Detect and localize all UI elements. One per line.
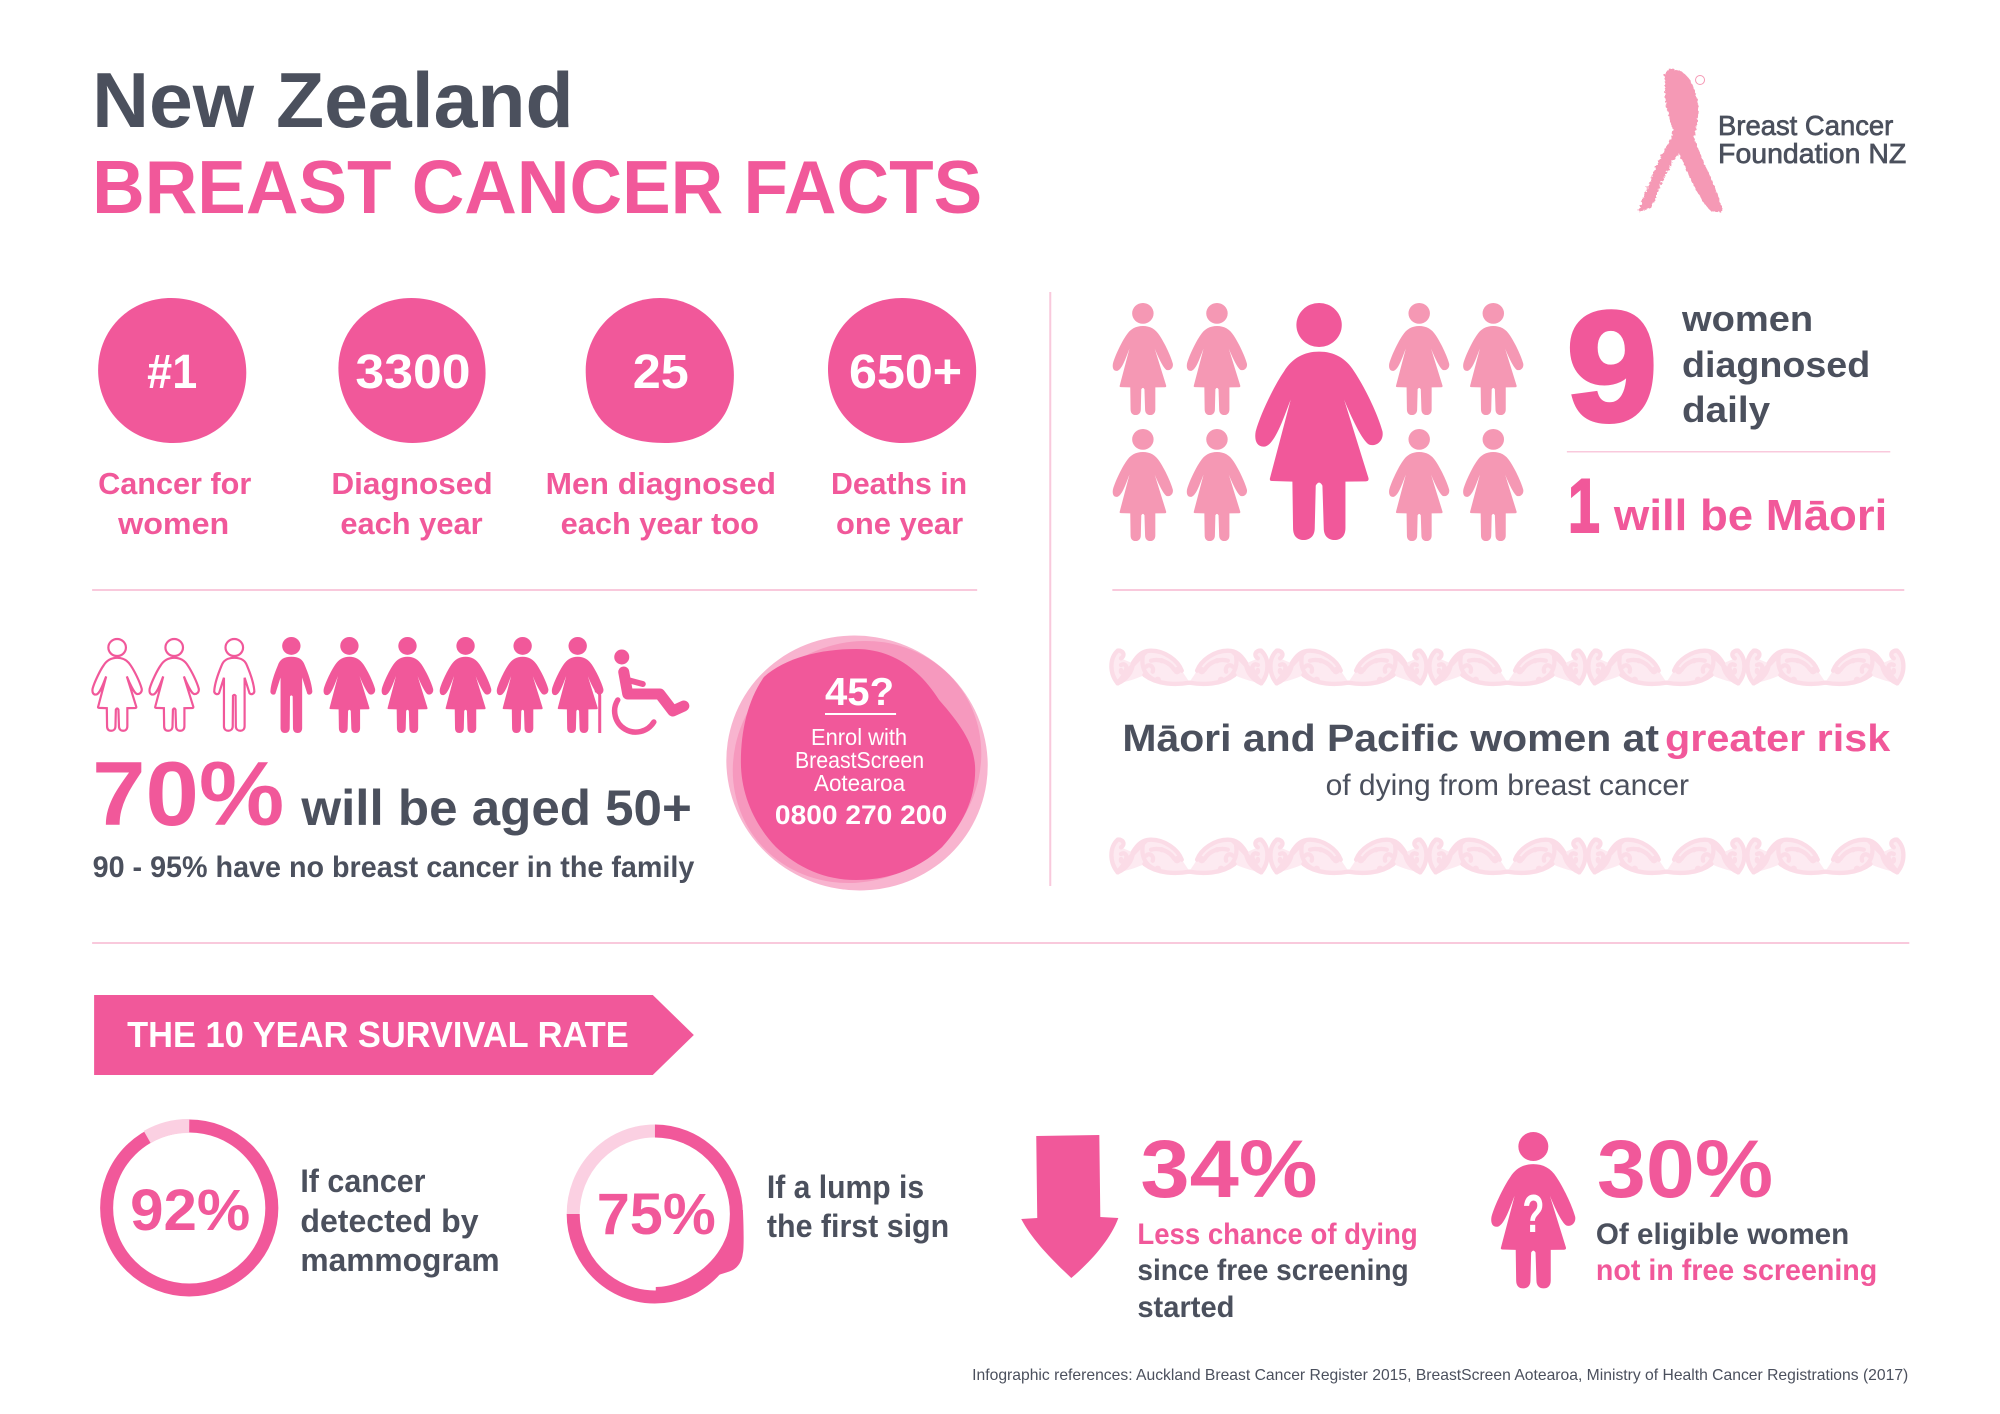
pattern: koru band bottom xyxy=(1111,840,1903,873)
stat: 3300 diagnosed: Diagnosed xyxy=(331,466,493,501)
stat: 92 percent ring: mammogram xyxy=(300,1242,500,1278)
icon: ribbon xyxy=(1639,69,1723,212)
stat: number one cancer xyxy=(98,298,251,541)
stat: 75 percent ring: the first sign xyxy=(767,1208,949,1244)
callout: 45 enrol: 0800 270 200 xyxy=(775,800,947,830)
stat: 70 percent: 90 - 95% have no breast cancer in the family xyxy=(93,851,695,884)
title: BREAST CANCER FACTS xyxy=(92,145,982,229)
panel: nine women diagnosed pictogram xyxy=(1113,303,1523,541)
text: Maori and Pacific risk: of dying from breast cancer xyxy=(1326,769,1689,802)
stat: 30 percent: 30% xyxy=(1597,1124,1773,1215)
stat: 30 percent: Of eligible women xyxy=(1596,1218,1849,1251)
stat: 3300 diagnosed xyxy=(331,298,493,541)
stat: 75 percent ring: 75% xyxy=(597,1182,716,1247)
stat: 92 percent ring: 92% xyxy=(130,1178,250,1243)
stat: 92 percent ring: detected by xyxy=(300,1203,479,1239)
stat: 25 men: Men diagnosed xyxy=(546,466,776,501)
stat: 34 percent: Less chance of dying xyxy=(1137,1218,1418,1251)
stat: 3300 diagnosed: each year xyxy=(340,506,483,541)
stat: 34 percent: started xyxy=(1137,1291,1234,1324)
title xyxy=(92,56,982,229)
stat: 30 percent: not in free screening xyxy=(1596,1254,1877,1287)
stat: 34 percent: 34% xyxy=(1140,1124,1318,1215)
stat: 9 women daily xyxy=(1567,280,1890,549)
stat: 25 men: 25 xyxy=(633,346,689,399)
stat: 34 percent: since free screening xyxy=(1137,1254,1409,1287)
stat: 9 women daily: women xyxy=(1681,298,1813,339)
text: Maori and Pacific risk: greater risk xyxy=(1665,718,1891,760)
stat: 9 women daily: daily xyxy=(1682,389,1770,430)
stat: number one cancer: women xyxy=(117,506,229,541)
logo: Breast Cancer Foundation NZ: Breast Cancer xyxy=(1718,110,1893,141)
footer references: Infographic references: Auckland Breast Cancer Register 2015, BreastScreen Aotearoa, Ministry of Health Cancer Registrations (2017) xyxy=(972,1367,1908,1384)
stat: 650+ deaths: Deaths in xyxy=(831,466,967,501)
icons: three outlined figures xyxy=(92,639,254,731)
stat: 9 women daily: will be Māori xyxy=(1613,491,1887,540)
stat: 9 women daily: 1 xyxy=(1568,464,1600,549)
stat: 92 percent ring: If cancer xyxy=(300,1163,426,1199)
stat: 9 women daily: diagnosed xyxy=(1682,344,1870,385)
stat: 650+ deaths: one year xyxy=(836,506,963,541)
stat: 70 percent xyxy=(92,744,695,884)
panel: key statistics xyxy=(98,298,976,541)
callout: 45 enrol: BreastScreen xyxy=(795,747,924,773)
stat: 75 percent ring xyxy=(573,1131,949,1302)
stat: 70 percent: 70% xyxy=(92,744,284,845)
text: Maori and Pacific risk: Māori and Pacific women at xyxy=(1122,718,1659,760)
panel: age icons xyxy=(92,637,684,733)
icon: down arrow xyxy=(1021,1135,1118,1278)
callout: 45 enrol xyxy=(685,592,1029,932)
icon: large woman xyxy=(1255,303,1383,540)
stat: 75 percent ring: If a lump is xyxy=(767,1169,924,1205)
stat: 30 percent xyxy=(1491,1124,1877,1288)
banner: survival rate xyxy=(94,995,694,1075)
stat: 9 women daily: 9 xyxy=(1567,280,1657,453)
stat: 70 percent: will be aged 50+ xyxy=(300,780,692,836)
logo: Breast Cancer Foundation NZ xyxy=(1639,69,1906,212)
icon: woman with question mark: ? xyxy=(1522,1184,1544,1244)
banner: survival rate: THE 10 YEAR SURVIVAL RATE xyxy=(127,1014,629,1055)
icon: woman with question mark xyxy=(1491,1132,1575,1288)
icons: small women xyxy=(1113,303,1523,541)
callout: 45 enrol: Enrol with xyxy=(811,724,907,750)
stat: 92 percent ring xyxy=(107,1126,500,1290)
stat: 650+ deaths: 650+ xyxy=(849,346,962,399)
stat: number one cancer: Cancer for xyxy=(98,466,251,501)
text: Maori and Pacific risk xyxy=(1122,718,1891,802)
stat: number one cancer: #1 xyxy=(147,346,197,399)
icon: wheelchair xyxy=(614,650,684,732)
stat: 25 men: each year too xyxy=(561,506,759,541)
logo: Breast Cancer Foundation NZ: Foundation NZ xyxy=(1718,138,1906,169)
stat: 3300 diagnosed: 3300 xyxy=(355,346,471,399)
title: New Zealand xyxy=(92,56,574,144)
stat: 25 men xyxy=(546,298,776,541)
stat: 650+ deaths xyxy=(828,298,976,541)
callout: 45 enrol: 45? xyxy=(825,671,894,714)
callout: 45 enrol: Aotearoa xyxy=(814,770,905,796)
pattern: koru band top xyxy=(1111,651,1903,684)
stat: 34 percent xyxy=(1021,1124,1418,1324)
icons: filled figures xyxy=(270,637,603,733)
